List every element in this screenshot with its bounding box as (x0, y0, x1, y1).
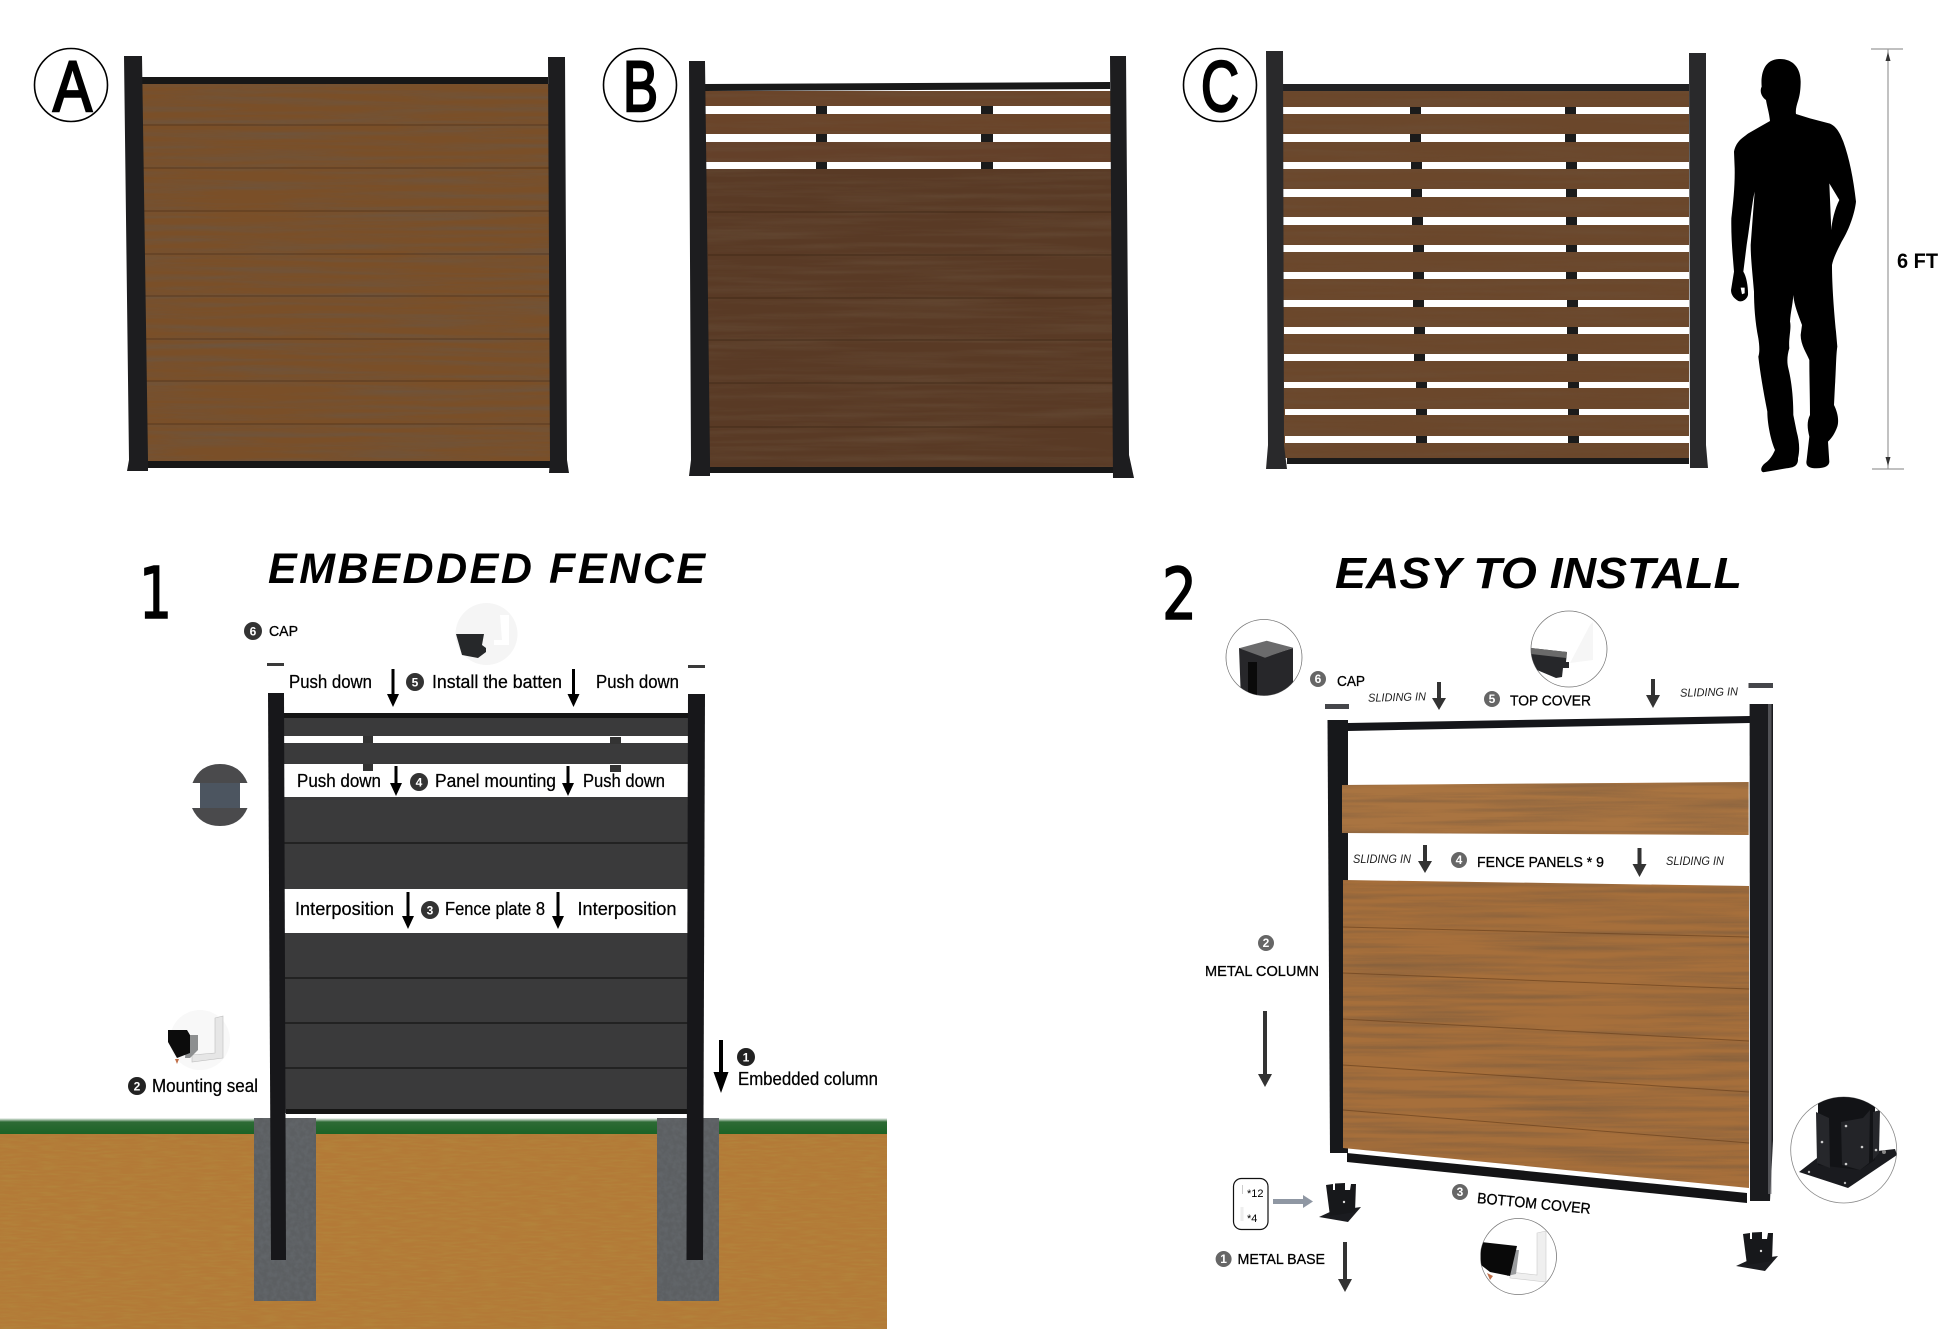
row: install the batten: Push down (289, 672, 372, 692)
badge: A: A (53, 48, 93, 127)
hardware box: *4 (1247, 1213, 1257, 1225)
section number 2: 2 (1162, 553, 1197, 636)
row: fence panels (1353, 845, 1725, 877)
row: fence plate: Interposition (578, 899, 676, 919)
row: fence plate: Interposition (295, 899, 394, 919)
fence C: slatted panel (1266, 51, 1708, 469)
height dimension: 6 FT: 6 FT (1897, 250, 1938, 273)
label: 2 mounting seal: Mounting seal (152, 1076, 258, 1096)
label: 2 mounting seal: 2 (134, 1080, 141, 1094)
embedded fence assembly (267, 663, 705, 1260)
row: top cover: SLIDING IN (1368, 691, 1427, 705)
label: 1 metal base: METAL BASE (1238, 1251, 1325, 1268)
row: panel mounting: 4 (416, 776, 423, 790)
fence B: solid panel with top slats (689, 56, 1134, 478)
label: 6 CAP (install) (1310, 671, 1365, 690)
row: panel mounting: Push down (297, 771, 381, 791)
row: fence plate: 3 (427, 904, 434, 918)
hardware box (1234, 1178, 1268, 1230)
row: panel mounting (297, 766, 665, 796)
label: 6 CAP (install): CAP (1337, 673, 1365, 690)
hardware box: *12 (1247, 1188, 1264, 1200)
row: panel mounting: Panel mounting (435, 771, 556, 791)
label: 6 CAP (244, 622, 298, 640)
label: 1 embedded column: Embedded column (738, 1069, 878, 1089)
row: install the batten: Push down (596, 672, 679, 692)
ground with soil and grass (0, 1118, 887, 1329)
arrow: hardware to base (1273, 1195, 1313, 1208)
label: 2 metal column (1205, 935, 1319, 1087)
label: 3 bottom cover (1452, 1184, 1592, 1218)
label: 3 bottom cover: 3 (1457, 1185, 1464, 1199)
row: install the batten: 5 (412, 676, 419, 690)
section number 1: 1 (139, 552, 172, 635)
badge: C: C (1201, 48, 1239, 127)
concrete footing left (254, 1118, 316, 1301)
row: fence panels: FENCE PANELS * 9 (1477, 854, 1604, 871)
human silhouette (1731, 59, 1856, 472)
label: 1 embedded column: 1 (743, 1050, 750, 1064)
badge: B (604, 48, 676, 127)
detail: top cover (1530, 611, 1607, 687)
row: top cover: TOP COVER (1510, 692, 1591, 710)
label: 1 embedded column (714, 1040, 878, 1093)
label: 6 CAP: CAP (269, 623, 298, 640)
label: 3 bottom cover: BOTTOM COVER (1476, 1190, 1592, 1218)
metal base bracket right (1736, 1232, 1778, 1271)
detail: bottom cover (1480, 1218, 1556, 1294)
row: install the batten (289, 669, 679, 707)
label: 2 metal column: 2 (1263, 936, 1270, 950)
detail: mounting seal (168, 1010, 230, 1070)
row: panel mounting: Push down (583, 771, 665, 791)
title: EMBEDDED FENCE: EMBEDDED FENCE (268, 545, 706, 593)
concrete footing right (657, 1118, 719, 1301)
detail: batten cap (456, 603, 518, 665)
row: fence panels: 4 (1456, 853, 1463, 867)
label: 6 CAP: 6 (250, 624, 257, 638)
row: install the batten: Install the batten (432, 672, 562, 692)
row: fence plate (295, 892, 676, 929)
label: 1 metal base (1216, 1242, 1352, 1292)
label: 6 CAP (install): 6 (1315, 672, 1322, 686)
row: fence panels: SLIDING IN (1353, 854, 1412, 866)
fence A: solid panel (124, 56, 569, 473)
title: EASY TO INSTALL: EASY TO INSTALL (1335, 549, 1742, 598)
row: top cover: SLIDING IN (1680, 686, 1739, 700)
detail: column cap (1226, 620, 1302, 700)
row: top cover: 5 (1489, 692, 1496, 706)
label: 2 metal column: METAL COLUMN (1205, 963, 1319, 980)
row: top cover (1368, 679, 1739, 710)
detail: post on base plate (1791, 1097, 1897, 1203)
height dimension: 6 FT (1871, 49, 1938, 469)
metal base bracket left (1319, 1183, 1361, 1222)
row: fence panels: SLIDING IN (1666, 856, 1725, 868)
badge: A (34, 48, 108, 127)
badge: B: B (623, 48, 658, 127)
install fence assembly (1325, 683, 1773, 1203)
label: 1 metal base: 1 (1220, 1252, 1227, 1266)
row: fence plate: Fence plate 8 (445, 899, 545, 919)
detail: interposition connector (192, 764, 248, 826)
